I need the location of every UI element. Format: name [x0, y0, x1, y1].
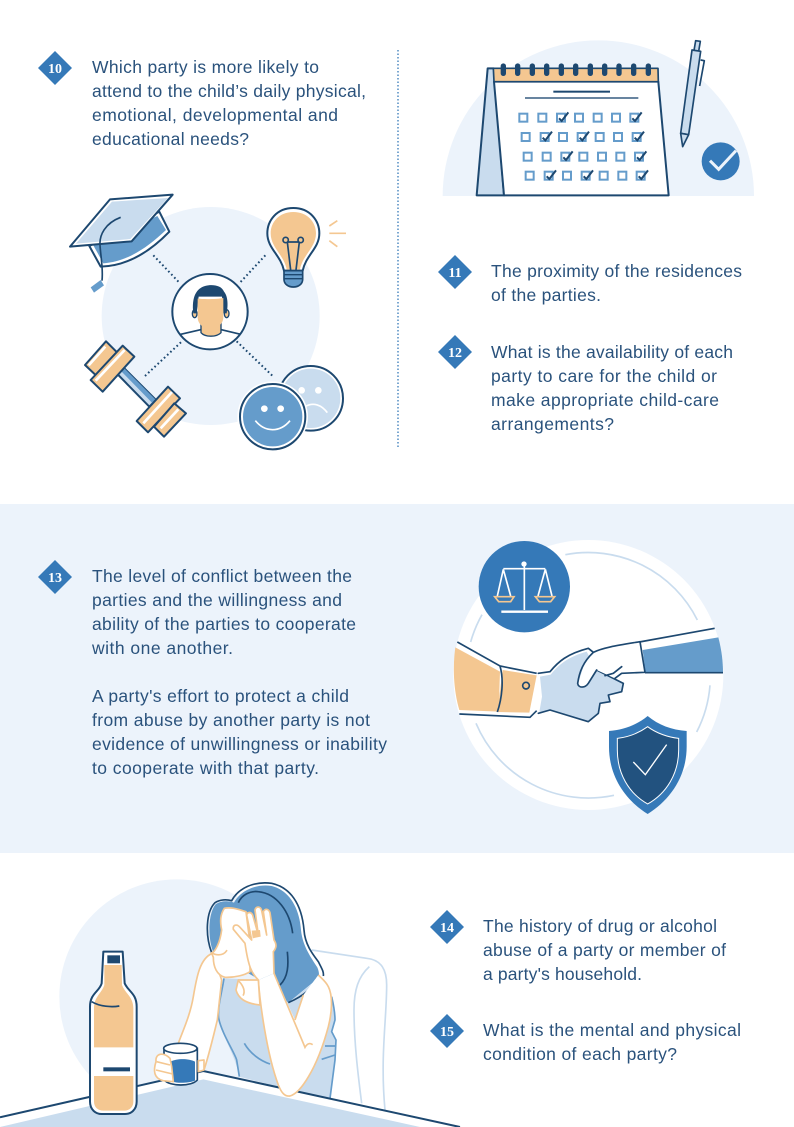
item 13 — [38, 560, 387, 778]
item 10: 10 — [48, 62, 62, 77]
icon: happy face — [237, 381, 308, 452]
icon: person — [172, 274, 248, 349]
illustration: handshake — [453, 540, 723, 814]
item 11: The proximity of the residences — [491, 261, 742, 281]
item 14 — [430, 910, 726, 984]
icon: pen — [681, 41, 704, 147]
icon: shaking hands — [538, 642, 645, 722]
item 11: of the parties. — [491, 285, 601, 305]
item 15: What is the mental and physical — [483, 1020, 741, 1040]
item 12 — [438, 335, 733, 434]
left arm — [178, 953, 222, 1070]
icon: scales of justice — [479, 541, 570, 632]
item 10: emotional, developmental and — [92, 105, 338, 125]
item 13: evidence of unwillingness or inability — [92, 734, 387, 754]
icon: bottle — [90, 952, 137, 1114]
item 14: abuse of a party or member of — [483, 940, 726, 960]
item 10: Which party is more likely to — [92, 57, 319, 77]
item 10 — [38, 51, 366, 149]
icon: check badge — [702, 142, 740, 180]
right sleeve — [639, 628, 723, 673]
item 11: 11 — [448, 266, 462, 281]
item 13: ability of the parties to cooperate — [92, 614, 356, 634]
item 15: condition of each party? — [483, 1044, 677, 1064]
dotted divider — [397, 50, 399, 448]
illustration: calendar — [443, 40, 754, 196]
table — [0, 1071, 460, 1127]
icon: dumbbell — [85, 341, 186, 437]
icon: shield — [609, 716, 687, 814]
icon: sad face — [278, 366, 343, 431]
dress — [218, 978, 336, 1100]
item 10: attend to the child’s daily physical, — [92, 81, 366, 101]
icon: glass in hand — [154, 1043, 204, 1085]
item 14: 14 — [440, 921, 454, 936]
left sleeve — [454, 642, 537, 717]
illustration: woman with bottle — [0, 879, 460, 1127]
chair — [312, 950, 387, 1110]
item 14: The history of drug or alcohol — [483, 916, 717, 936]
item 12: party to care for the child or — [491, 366, 717, 386]
forearm — [258, 973, 331, 1096]
item 15 — [430, 1014, 741, 1064]
illustration: child's needs — [70, 195, 346, 452]
item 12: What is the availability of each — [491, 342, 733, 362]
icon: graduation cap — [70, 195, 173, 293]
item 12: arrangements? — [491, 414, 614, 434]
item 11 — [438, 255, 742, 305]
woman head and hair — [207, 883, 323, 1003]
item 10: educational needs? — [92, 129, 249, 149]
item 12: 12 — [448, 346, 462, 361]
item 13: 13 — [48, 571, 62, 586]
item 13: The level of conflict between the — [92, 566, 352, 586]
item 12: make appropriate child-care — [491, 390, 719, 410]
icon: light bulb — [267, 208, 346, 287]
item 13: to cooperate with that party. — [92, 758, 319, 778]
item 14: a party's household. — [483, 964, 642, 984]
item 13: parties and the willingness and — [92, 590, 342, 610]
woman neck, face and hand — [212, 907, 276, 1005]
item 15: 15 — [440, 1025, 454, 1040]
item 13: A party's effort to protect a child — [92, 686, 349, 706]
item 13: with one another. — [91, 638, 233, 658]
item 13: from abuse by another party is not — [92, 710, 370, 730]
panel: conflict section background — [0, 504, 794, 853]
